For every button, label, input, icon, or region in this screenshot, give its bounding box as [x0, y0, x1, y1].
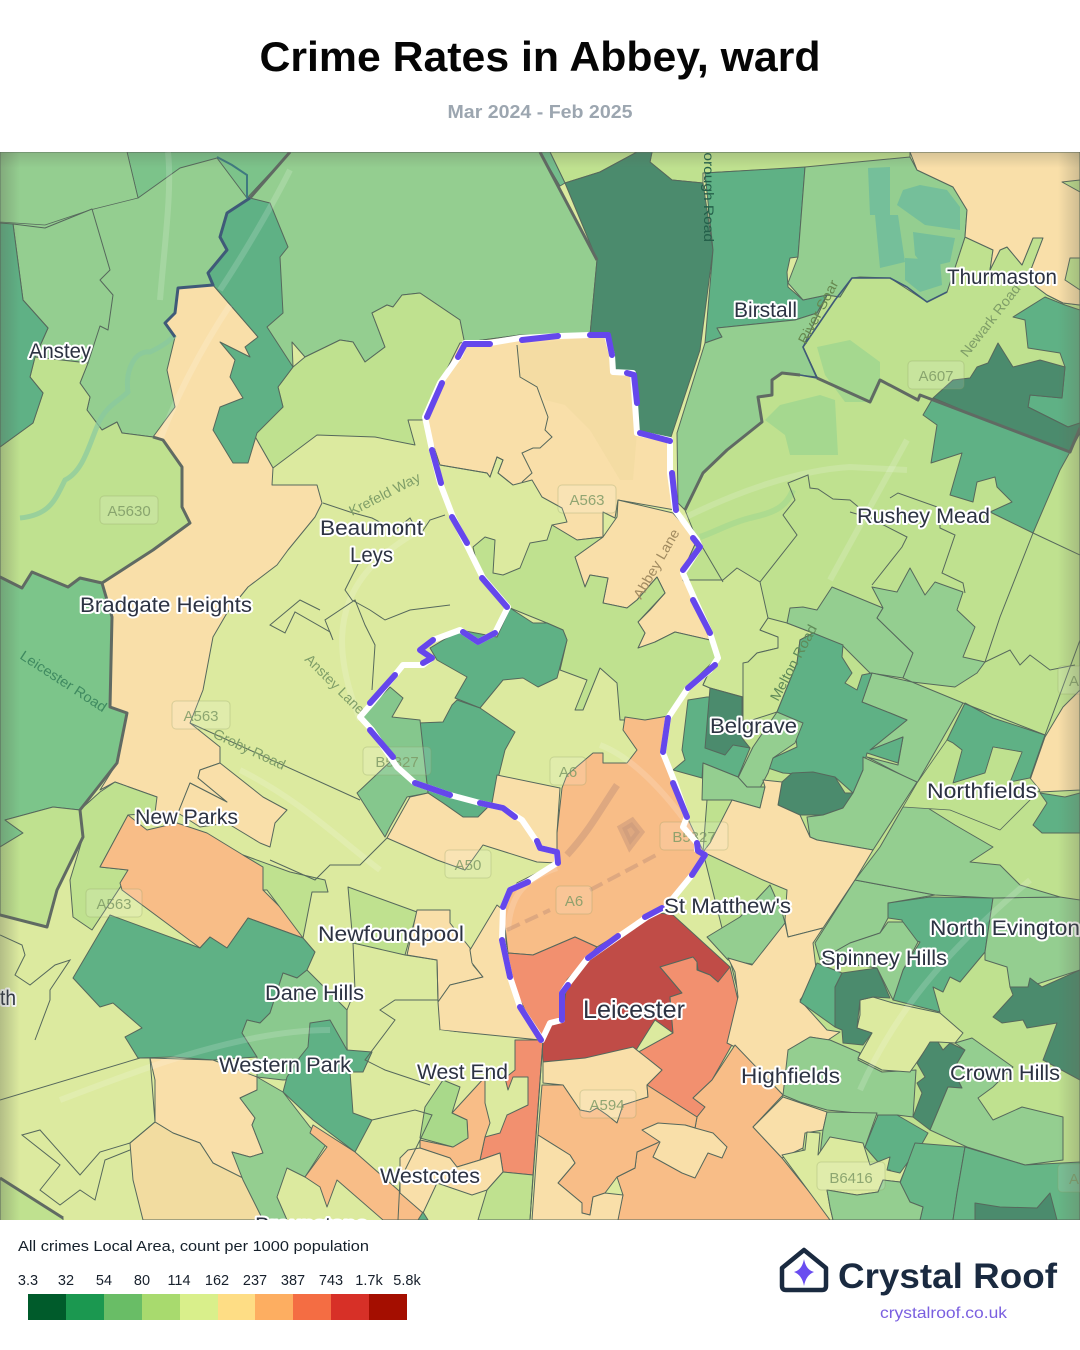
road shields: A5630 [107, 503, 151, 520]
road names: River Soar [795, 277, 842, 346]
road names: Newark Road [957, 281, 1024, 360]
road names: Krefeld Way [346, 469, 423, 519]
legend values: 1.7k [355, 1273, 383, 1289]
place labels [0, 266, 1080, 1237]
road names: Melton Road [767, 622, 820, 703]
legend values: 54 [96, 1273, 112, 1289]
place labels: North Evington [930, 917, 1080, 940]
legend values: 162 [205, 1273, 229, 1289]
parkland ponds and water tint [765, 167, 960, 455]
water: river path [20, 335, 175, 518]
choropleth areas [0, 152, 1080, 1225]
legend values: 743 [319, 1273, 343, 1289]
legend values: 32 [58, 1273, 74, 1289]
road names: Borough Road [701, 142, 717, 242]
map edge vignette [0, 152, 1080, 1220]
river boundary line [165, 198, 947, 378]
road shields: B6416 [829, 1170, 873, 1187]
east side [783, 1037, 916, 1117]
road shields [86, 361, 1080, 1192]
wordmark: Crystal Roof [838, 1257, 1057, 1296]
legend values: 80 [134, 1273, 150, 1289]
place labels: Dane Hills [265, 982, 364, 1005]
road names: Abbey Lane [630, 526, 683, 602]
place labels: Leys [350, 544, 393, 567]
legend values: 387 [281, 1273, 305, 1289]
legend title: All crimes Local Area, count per 1000 population [18, 1239, 369, 1255]
legend values: 237 [243, 1273, 267, 1289]
road shields: B5327 [375, 754, 419, 771]
thick district boundaries [0, 152, 1080, 1218]
road shields: A [1069, 673, 1079, 690]
place labels: Bradgate Heights [80, 594, 252, 617]
place labels: th [0, 987, 16, 1010]
subtitle: date range: Mar 2024 - Feb 2025 [448, 102, 632, 122]
place labels: Leicester [583, 996, 685, 1024]
place labels: Braunstone [255, 1214, 368, 1237]
road shields: B5327 [672, 829, 716, 846]
place labels: West End [417, 1061, 508, 1084]
place labels: Crown Hills [950, 1062, 1060, 1085]
road shields: A594 [589, 1097, 625, 1114]
road shields: A6 [559, 764, 577, 781]
road shields: A6 [565, 893, 583, 910]
place labels: Spinney Hills [821, 947, 947, 970]
road shields: A50 [455, 857, 481, 874]
place labels: Beaumont [320, 517, 423, 540]
road shields: A607 [918, 368, 954, 385]
title: Crime Rates in Abbey, ward [260, 33, 820, 80]
legend [18, 1239, 421, 1320]
road names: Groby Road [211, 725, 288, 773]
place labels: Thurmaston [947, 266, 1057, 289]
place labels: Birstall [734, 299, 797, 322]
place labels: Highfields [741, 1065, 840, 1088]
road names: Anstey Lane [302, 651, 368, 717]
legend values: 5.8k [393, 1273, 421, 1289]
place labels: St Matthew's [664, 895, 791, 918]
road names: Leicester Road [17, 647, 110, 715]
place labels: Rushey Mead [857, 505, 990, 528]
website: crystalroof.co.uk [880, 1305, 1008, 1322]
road shields: A563 [569, 492, 605, 509]
place labels: New Parks [135, 806, 238, 829]
ward boundary: Abbey [360, 335, 718, 1040]
lime right half [682, 237, 1080, 1220]
place labels: Belgrave [710, 715, 797, 738]
road shields: A [1069, 1171, 1079, 1188]
road names [17, 142, 1024, 773]
road shields: A563 [96, 896, 132, 913]
legend values [18, 1273, 421, 1289]
legend values: 114 [167, 1273, 191, 1289]
city-centre railway and dark features [507, 785, 660, 930]
legend values: 3.3 [18, 1273, 38, 1289]
place labels: Western Park [219, 1054, 352, 1077]
place labels: Westcotes [380, 1165, 480, 1188]
place labels: Anstey [29, 340, 91, 363]
icon: house with star [782, 1250, 826, 1290]
boundary details [0, 345, 1080, 1220]
place labels: Northfields [927, 780, 1037, 803]
roads [60, 152, 1030, 1100]
legend colour scale [28, 1294, 407, 1320]
place labels: Newfoundpool [318, 923, 464, 946]
road shields: A563 [183, 708, 219, 725]
logo: Crystal Roof [782, 1250, 1057, 1322]
